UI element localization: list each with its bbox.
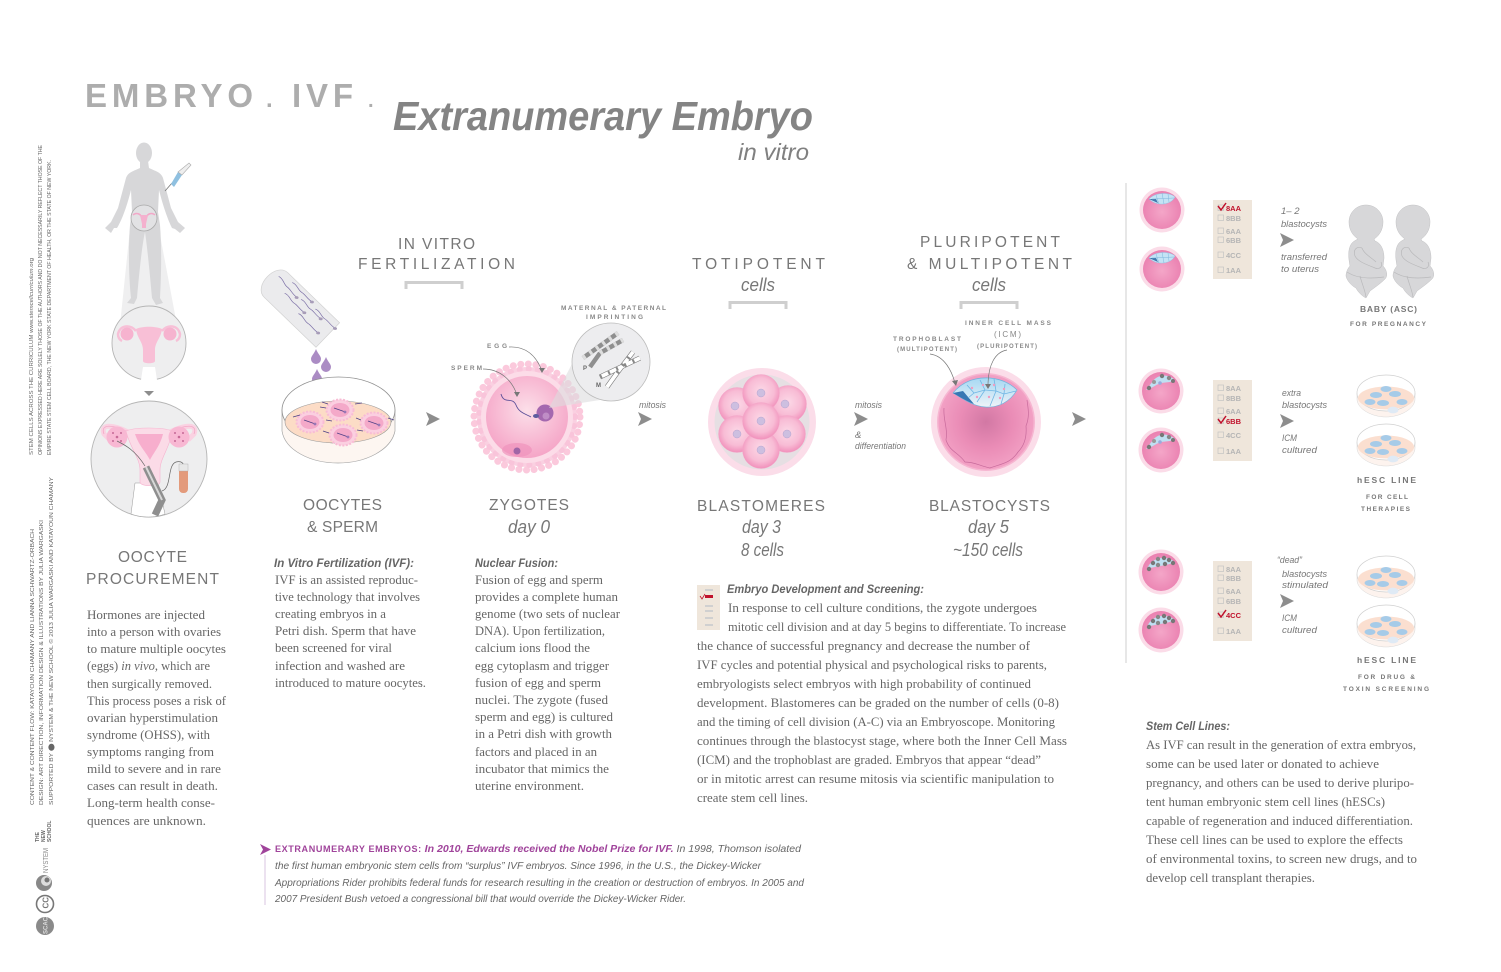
text block: oocyte procurement: into a person with ovaries [87,625,221,639]
label and arrow: mitosis [638,400,666,426]
heading: totipotent cells [692,256,826,309]
text block: embryo development and screening: In response to cell culture conditions, the zygote undergoes [728,601,1037,615]
footnote: extranumerary embryos: Appropriations Rider prohibits federal funds for research resulting in the creation or destruction of embryos. In 2005 and [274,877,805,889]
logos [35,821,54,935]
text block: stem cell lines: some can be used later or donated to achieve [1146,757,1379,771]
text block: embryo development and screening: IVF cycles and potential physical and psychological risks to parents, [697,658,1047,672]
text block: stem cell lines: tent human embryonic stem cell lines (hESCs) [1146,795,1385,809]
footnote: extranumerary embryos [260,843,805,905]
arrow [426,412,440,426]
row: dead blastocysts to drug and toxin screening: ICM [1282,613,1297,624]
text block: embryo development and screening: development. Blastomeres can be graded on the number of cells (0-8) [697,696,1059,710]
logos: NEW [41,830,47,842]
title: . [266,86,273,113]
text block: oocyte procurement: cases can result in death. [87,779,218,793]
text block: IVF: In Vitro Fertilization (IVF): [274,556,414,570]
text block: oocyte procurement: symptoms ranging from [87,745,214,759]
text block: embryo development and screening: or in mitotic arrest can resume mitosis via scientific manipulation to [697,772,1054,786]
heading: pluripotent and multipotent cells: & MULTIPOTENT [907,256,1073,273]
row: dead blastocysts to drug and toxin screening: TOXIN SCREENING [1343,686,1429,693]
text block: embryo development and screening: the chance of successful pregnancy and decrease the number of [697,639,1031,653]
footnote: extranumerary embryos: EXTRANUMERARY EMBRYOS: In 2010, Edwards received the Nobel Prize for IVF. In 1998, Thomson isolated [275,843,802,855]
callout labels: zygote: EGG [487,343,507,350]
text block: embryo development and screening: continues through the blastocyst stage, where both the Inner Cell Mass [697,734,1067,748]
heading: blastocysts: day 5 [968,517,1010,537]
label and arrow: mitosis and differentiation: mitosis [855,400,882,411]
text block: stem cell lines: pregnancy, and others can be used to derive pluripo- [1146,776,1414,790]
row: 1-2 blastocysts for pregnancy: 8AA [1226,204,1242,213]
row: dead blastocysts to drug and toxin screening: stimulated [1282,580,1329,591]
heading: blastocysts [929,498,1050,560]
heading: oocyte procurement: PROCUREMENT [86,571,220,588]
row: dead blastocysts to drug and toxin screening: 1AA [1226,627,1242,636]
row: extra blastocysts to cell therapies: blastocysts [1282,400,1327,411]
text block: stem cell lines: of environmental toxins, to screen new drugs, and to [1146,852,1417,866]
label and arrow: mitosis and differentiation [854,400,906,452]
row: extra blastocysts to cell therapies: 8BB [1226,394,1242,403]
logos: THE [35,831,41,842]
callout labels: blastocyst: TROPHOBLAST [893,336,961,343]
title: IVF [292,77,353,114]
text block: nuclear fusion: sperm and egg) is cultured [475,710,614,724]
callout labels: blastocyst: INNER CELL MASS [965,320,1052,327]
heading: oocyte procurement [86,549,220,588]
heading: in vitro fertilization: FERTILIZATION [358,256,515,273]
icon: blastomeres [708,368,816,476]
callout labels: blastocyst: (PLURIPOTENT) [977,344,1037,350]
row: extra blastocysts to cell therapies [1138,368,1416,513]
callout labels: zygote [451,305,666,397]
heading: totipotent cells: cells [741,275,775,295]
callout labels: blastocyst: (MULTIPOTENT) [897,347,957,353]
heading: blastocysts: ~150 cells [953,540,1023,560]
row: dead blastocysts to drug and toxin screening: 6BB [1226,597,1242,606]
row: dead blastocysts to drug and toxin screening: cultured [1282,625,1318,636]
heading: pluripotent and multipotent cells: PLURIPOTENT [920,234,1061,251]
icon: blastocyst [931,367,1041,477]
footnote: extranumerary embryos: 2007 President Bush vetoed a congressional bill that would override the Dickey-Wicker Rider. [274,893,686,905]
heading: blastomeres: BLASTOMERES [697,498,825,515]
heading: oocytes and sperm: & SPERM [307,519,378,536]
icon: small screening card [697,585,720,630]
text block: nuclear fusion: provides a complete human [475,590,619,604]
text block: nuclear fusion: calcium ions flood the [475,641,590,655]
heading: in vitro fertilization: IN VITRO [398,236,475,253]
row: extra blastocysts to cell therapies: ICM [1282,433,1297,444]
row: extra blastocysts to cell therapies: THERAPIES [1361,506,1411,513]
row: 1-2 blastocysts for pregnancy: BABY (ASC) [1360,304,1417,314]
text block: stem cell lines: These cell lines can be used to explore the effects [1146,833,1403,847]
text block: IVF: Petri dish. Sperm that have [275,624,416,638]
row: extra blastocysts to cell therapies: extra [1282,388,1301,399]
heading: totipotent cells: TOTIPOTENT [692,256,826,273]
row: dead blastocysts to drug and toxin screening: hESC LINE [1357,655,1416,665]
text block: IVF: been screened for viral [275,641,393,655]
text block: IVF: infection and washed are [275,659,405,673]
text block: nuclear fusion [475,556,621,793]
row: extra blastocysts to cell therapies: cultured [1282,445,1318,456]
text block: embryo development and screening [697,582,1067,805]
text block: nuclear fusion: egg cytoplasm and trigger [475,659,610,673]
heading: blastomeres: day 3 [742,517,781,537]
row: extra blastocysts to cell therapies: 6BB [1226,417,1242,426]
text block: nuclear fusion: genome (two sets of nuclear [475,607,621,621]
text block: IVF: introduced to mature oocytes. [275,676,426,690]
row: dead blastocysts to drug and toxin screening: 4CC [1226,611,1242,620]
row: 1-2 blastocysts for pregnancy: blastocysts [1281,219,1327,230]
row: dead blastocysts to drug and toxin screening: FOR DRUG & [1358,674,1415,681]
text block: oocyte procurement: quences are unknown. [87,814,206,828]
icon: pipette [254,257,349,351]
text block: embryo development and screening: mitotic cell division and at day 5 begins to differentiate. To increase [728,620,1066,634]
text block: IVF: IVF is an assisted reproduc- [275,573,418,587]
row: dead blastocysts to drug and toxin screening: 8AA [1226,565,1242,574]
row: extra blastocysts to cell therapies: 4CC [1226,431,1242,440]
callout labels: zygote: MATERNAL & PATERNAL [561,305,666,312]
title: EMBRYO [85,77,253,114]
heading: blastomeres: 8 cells [741,540,784,560]
row: 1-2 blastocysts for pregnancy: 1– 2 [1281,206,1300,217]
text block: stem cell lines: Stem Cell Lines: [1146,719,1230,733]
text block: stem cell lines: As IVF can result in the generation of extra embryos, [1146,738,1416,752]
text block: oocyte procurement: This process poses a risk of [87,694,227,708]
callout labels: blastocyst: (ICM) [994,330,1021,339]
text block: oocyte procurement: mild to severe and in rare [87,762,221,776]
label and arrow: mitosis: mitosis [639,400,666,411]
heading: pluripotent and multipotent cells [907,234,1073,309]
icon: drops [311,349,331,384]
row: extra blastocysts to cell therapies: 1AA [1226,447,1242,456]
text block: IVF: creating embryos in a [275,607,386,621]
text block: nuclear fusion: uterine environment. [475,779,584,793]
text block: oocyte procurement: Hormones are injected [87,608,206,622]
logos: SCAC [44,916,50,934]
heading: in vitro fertilization [358,236,515,289]
heading: oocyte procurement: OOCYTE [118,549,187,566]
title: . [368,90,374,112]
credits: vertical text: EMPIRE STATE STEM CELL BOARD, THE NEW YORK STATE DEPARTMENT OF HEALTH, OR THE STATE OF NEW YORK. [47,160,53,455]
callout labels: blastocyst [893,320,1052,389]
row: dead blastocysts to drug and toxin screening: 8BB [1226,574,1242,583]
row: 1-2 blastocysts for pregnancy: 1AA [1226,266,1242,275]
text block: nuclear fusion: Fusion of egg and sperm [475,573,603,587]
text block: embryo development and screening: create stem cell lines. [697,791,808,805]
footnote: extranumerary embryos: the first human embryonic stem cells from “surplus” IVF embryos. Since 1996, in the U.S., the Dickey-Wicker [275,860,761,872]
logos: SCHOOL [47,821,53,842]
text block: nuclear fusion: nuclei. The zygote (fused [475,693,609,707]
row: extra blastocysts to cell therapies: hESC LINE [1357,475,1416,485]
row: 1-2 blastocysts for pregnancy: 4CC [1226,251,1242,260]
text block: embryo development and screening: (ICM) and the trophoblast are graded. Embryos that appear “dead” [697,753,1041,767]
credits: vertical text: DESIGN: ART DIRECTION, INFORMATION DESIGN & ILLUSTRATIONS BY JULIA WARGASKI [39,520,45,805]
row: 1-2 blastocysts for pregnancy: FOR PREGNANCY [1350,321,1427,328]
row: 1-2 blastocysts for pregnancy: to uterus [1281,264,1319,275]
text block: IVF [274,556,426,690]
row: dead blastocysts to drug and toxin screening [1138,550,1429,693]
logos: CC [42,897,50,908]
text block: nuclear fusion: incubator that mimics the [475,762,609,776]
text block: oocyte procurement [87,608,227,828]
credits: vertical text: STEM CELLS ACROSS THE CURRICULUM www.stemcellcurriculum.org [29,258,35,455]
text block: IVF: tive technology that involves [275,590,420,604]
row: extra blastocysts to cell therapies: 6AA [1226,407,1242,416]
heading: zygotes day 0: day 0 [508,517,550,537]
heading: zygotes day 0: ZYGOTES [489,497,569,514]
callout labels: zygote: SPERM [451,365,482,372]
text block: stem cell lines [1146,719,1417,885]
heading: oocytes and sperm [303,497,382,536]
title: Extranumerary Embryo [393,93,813,139]
text block: embryo development and screening: embryologists select embryos with high probability of continued [697,677,1032,691]
text block: nuclear fusion: DNA). Upon fertilization, [475,624,605,638]
row: dead blastocysts to drug and toxin screening: “dead” [1277,555,1303,566]
divider [1125,183,1127,663]
text block: oocyte procurement: (eggs) in vivo, which are [87,659,210,673]
row: 1-2 blastocysts for pregnancy: 6AA [1226,227,1242,236]
arrow [1072,412,1086,426]
text block: nuclear fusion: Nuclear Fusion: [475,556,558,570]
row: 1-2 blastocysts for pregnancy [1140,188,1434,328]
heading: pluripotent and multipotent cells: cells [972,275,1006,295]
row: dead blastocysts to drug and toxin screening: blastocysts [1282,569,1327,580]
text block: embryo development and screening: Embryo Development and Screening: [727,582,924,596]
row: dead blastocysts to drug and toxin screening: 6AA [1226,587,1242,596]
title: in vitro [738,139,809,165]
text block: stem cell lines: capable of regeneration and induced differentiation. [1146,814,1413,828]
credits: vertical text: CONTENT & CONTENT FLOW: KATAYOUN CHAMANY AND LIANNA SCHWARTZ-ORBACH [30,529,36,805]
row: 1-2 blastocysts for pregnancy: transferred [1281,252,1328,263]
logos: NYSTEM [43,848,50,873]
icon: petri dish with oocytes and sperm [282,377,395,463]
row: extra blastocysts to cell therapies: FOR CELL [1366,494,1408,501]
callout labels: zygote: IMPRINTING [586,314,643,321]
text block: nuclear fusion: factors and placed in an [475,745,598,759]
credits: vertical text: SUPPORTED BY ⬤ NYSTEM & THE NEW SCHOOL © 2013 JULIA WARGASKI AND KATAYOUN CHAMANY [48,477,55,805]
text block: oocyte procurement: Long-term health conse- [87,796,215,810]
icon: body with syringe and enlargements [91,142,207,517]
icon: zygote: M [596,383,601,389]
text block: oocyte procurement: ovarian hyperstimulation [87,711,219,725]
label and arrow: mitosis and differentiation: differentiation [855,441,906,452]
text block: stem cell lines: develop cell transplant therapies. [1146,871,1315,885]
text block: oocyte procurement: then surgically removed. [87,677,212,691]
title [85,77,813,165]
text block: oocyte procurement: syndrome (OHSS), with [87,728,211,742]
credits: vertical text [29,145,55,805]
text block: embryo development and screening: and the timing of cell division (A-C) via an Embryoscope. Monitoring [697,715,1056,729]
text block: nuclear fusion: in a Petri dish with growth [475,727,613,741]
icon: zygote: P [583,366,587,372]
label and arrow: mitosis and differentiation: & [855,430,861,441]
icon: zygote [474,323,650,470]
heading: blastocysts: BLASTOCYSTS [929,498,1050,515]
heading: oocytes and sperm: OOCYTES [303,497,382,514]
text block: nuclear fusion: fusion of egg and sperm [475,676,601,690]
row: extra blastocysts to cell therapies: 8AA [1226,384,1242,393]
credits: vertical text: OPINIONS EXPRESSED HERE ARE SOLELY THOSE OF THE AUTHORS AND DO NOT NECESSARILY REFLECT THOSE OF THE [38,145,44,455]
row: 1-2 blastocysts for pregnancy: 6BB [1226,236,1242,245]
heading: blastomeres [697,498,825,560]
text block: oocyte procurement: to mature multiple oocytes [87,642,226,656]
heading: zygotes day 0 [489,497,569,537]
row: 1-2 blastocysts for pregnancy: 8BB [1226,214,1242,223]
